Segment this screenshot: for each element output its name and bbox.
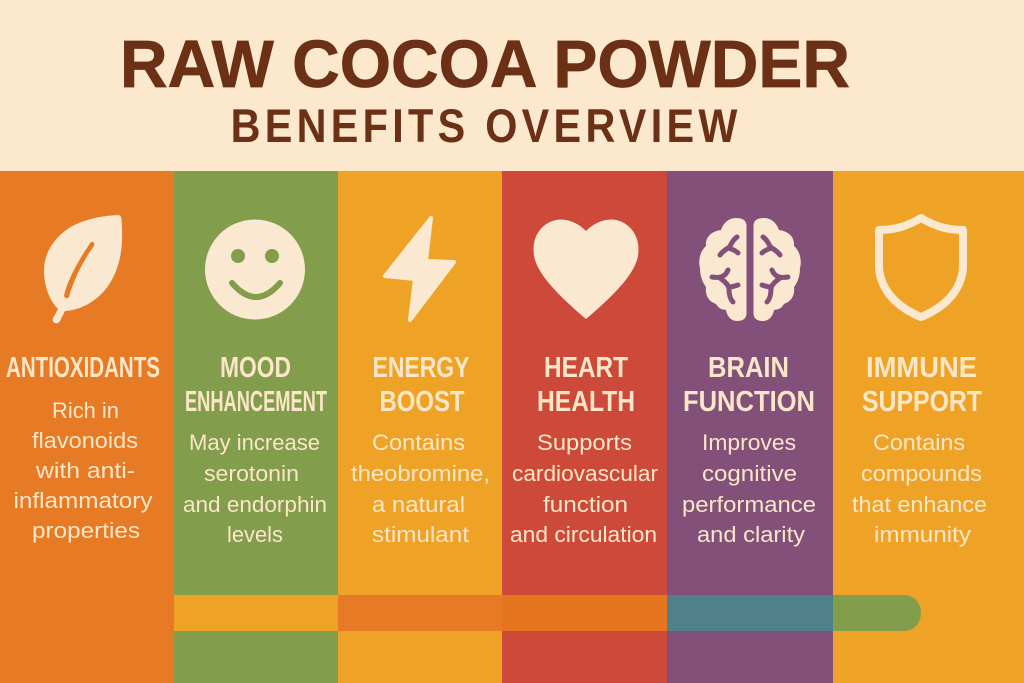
panel: mood enhancement (174, 171, 338, 683)
text: immune description: compounds (861, 461, 982, 486)
icon: smiley (205, 220, 305, 320)
icon: lightning bolt (385, 218, 454, 320)
text: energy description (351, 430, 490, 547)
text: antioxidants description: with anti- (35, 458, 135, 483)
icon: heart (534, 220, 638, 319)
title: RAW COCOA POWDER (120, 27, 850, 102)
heading: brain function: BRAIN (708, 352, 789, 384)
text: brain description (682, 430, 816, 547)
heading: mood enhancement: MOOD (220, 352, 291, 384)
heading: immune support (862, 352, 982, 418)
text: energy description: stimulant (372, 522, 470, 547)
text: mood description: levels (227, 522, 283, 547)
heading: antioxidants: ANTIOXIDANTS (6, 352, 160, 384)
text: heart description: Supports (537, 430, 632, 455)
heading: immune support: SUPPORT (862, 386, 982, 418)
heading: immune support: IMMUNE (866, 352, 977, 384)
heading: energy boost: BOOST (380, 386, 465, 418)
text: heart description (510, 430, 658, 547)
text: antioxidants description: inflammatory (14, 488, 153, 513)
text: immune description (852, 430, 987, 547)
text: heart description: and circulation (510, 522, 657, 547)
heading: mood enhancement (185, 352, 327, 418)
panel: immune support (833, 171, 1024, 683)
heading: heart health: HEALTH (537, 386, 635, 418)
text: immune description: that enhance (852, 492, 987, 517)
text: brain description: Improves (702, 430, 796, 455)
heading: energy boost (372, 352, 470, 418)
icon: shield (879, 218, 963, 317)
text: mood description: May increase (189, 430, 320, 455)
heading: brain function (683, 352, 815, 418)
text: brain description: performance (682, 492, 816, 517)
heading: energy boost: ENERGY (372, 352, 470, 384)
text: mood description (183, 430, 327, 547)
text: antioxidants description: properties (32, 518, 140, 543)
text: antioxidants description: Rich in (52, 398, 119, 423)
text: heart description: cardiovascular (512, 461, 658, 486)
text: brain description: and clarity (697, 522, 806, 547)
text: antioxidants description: flavonoids (32, 428, 138, 453)
heading: heart health (537, 352, 635, 418)
icon: brain (699, 218, 801, 321)
heading: mood enhancement: ENHANCEMENT (185, 386, 327, 418)
panel: heart health (502, 171, 667, 683)
text: heart description: function (543, 492, 628, 517)
heading: heart health: HEART (544, 352, 628, 384)
panel: energy boost (338, 171, 502, 683)
text: energy description: Contains (372, 430, 465, 455)
panel: brain function (667, 171, 833, 683)
subtitle: BENEFITS OVERVIEW (231, 101, 738, 153)
text: brain description: cognitive (702, 461, 797, 486)
text: immune description: Contains (873, 430, 965, 455)
text: mood description: and endorphin (183, 492, 327, 517)
icon: leaf (44, 215, 122, 323)
text: energy description: theobromine, (351, 461, 490, 486)
header band (0, 0, 1024, 171)
text: mood description: serotonin (204, 461, 299, 486)
text: immune description: immunity (874, 522, 972, 547)
heading: brain function: FUNCTION (683, 386, 815, 418)
text: antioxidants description (14, 398, 153, 543)
panel: antioxidants (0, 171, 174, 683)
text: energy description: a natural (372, 492, 465, 517)
progress bar (174, 595, 921, 631)
